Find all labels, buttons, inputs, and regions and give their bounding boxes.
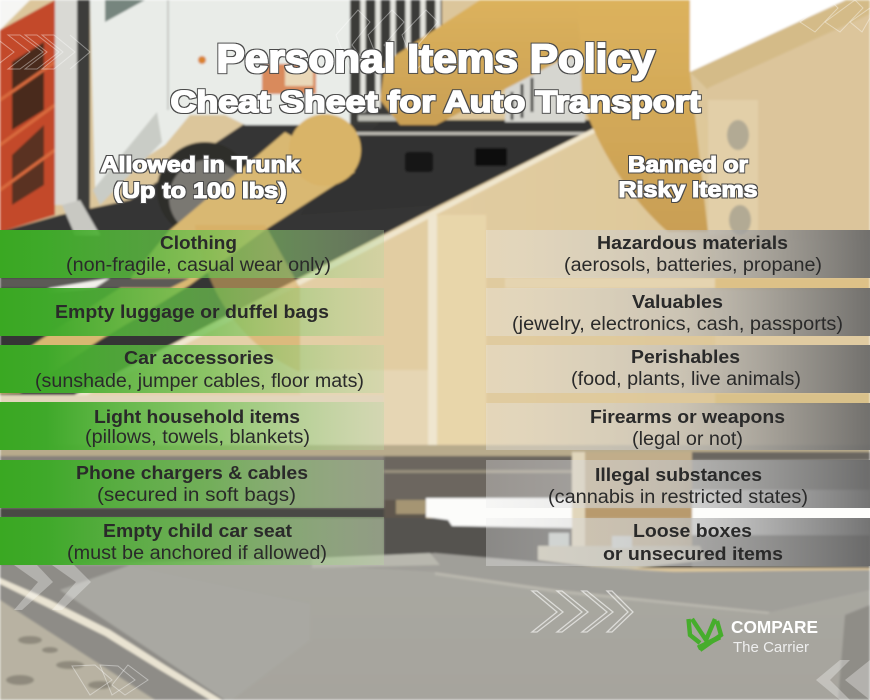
row: firearms: Firearms or weapons bbox=[590, 406, 785, 427]
row: loose boxes: Loose boxes bbox=[633, 520, 752, 541]
logo: compare the carrier: COMPARE bbox=[731, 617, 818, 637]
row: empty luggage: Empty luggage or duffel bags bbox=[55, 301, 329, 322]
icon: green logo mark bbox=[688, 619, 721, 650]
row: loose boxes: or unsecured items bbox=[603, 543, 783, 564]
row: hazardous materials: (aerosols, batteries, propane) bbox=[564, 255, 822, 276]
row: perishables: (food, plants, live animals) bbox=[571, 369, 801, 390]
row: empty child car seat: (must be anchored if allowed) bbox=[67, 543, 327, 564]
row: empty luggage bbox=[0, 288, 384, 336]
row: clothing: Clothing bbox=[160, 232, 237, 253]
row: empty child car seat: Empty child car seat bbox=[103, 520, 292, 541]
title bbox=[170, 37, 700, 119]
row: light household items: Light household items bbox=[94, 406, 300, 427]
row: valuables bbox=[486, 288, 870, 336]
row: car accessories: Car accessories bbox=[124, 347, 274, 368]
row: car accessories: (sunshade, jumper cables, floor mats) bbox=[35, 371, 364, 392]
row: illegal substances bbox=[486, 460, 870, 508]
row: valuables: (jewelry, electronics, cash, passports) bbox=[512, 314, 843, 335]
row: phone chargers bbox=[0, 460, 384, 508]
panel: allowed items bbox=[0, 230, 384, 565]
panel: banned items bbox=[486, 230, 870, 566]
heading: banned or risky items: Banned or bbox=[628, 152, 748, 177]
row: illegal substances: (cannabis in restricted states) bbox=[548, 487, 808, 508]
heading: banned or risky items: Risky Items bbox=[618, 177, 758, 202]
logo: compare the carrier bbox=[688, 617, 818, 656]
heading: allowed in trunk: (Up to 100 lbs) bbox=[114, 178, 286, 203]
title line 1: Personal Items Policy bbox=[216, 37, 655, 81]
heading: banned or risky items bbox=[618, 152, 758, 202]
row: perishables bbox=[486, 345, 870, 393]
row: hazardous materials bbox=[486, 230, 870, 278]
row: clothing bbox=[0, 230, 384, 278]
row: car accessories bbox=[0, 345, 384, 393]
row: valuables: Valuables bbox=[632, 291, 723, 312]
row: firearms: (legal or not) bbox=[632, 429, 743, 450]
row: light household items bbox=[0, 402, 384, 450]
heading: allowed in trunk bbox=[100, 152, 300, 203]
row: clothing: (non-fragile, casual wear only) bbox=[66, 255, 331, 276]
title line 2: Cheat Sheet for Auto Transport bbox=[170, 84, 700, 119]
row: hazardous materials: Hazardous materials bbox=[597, 232, 788, 253]
row: phone chargers: Phone chargers & cables bbox=[76, 462, 308, 483]
row: empty child car seat bbox=[0, 517, 384, 565]
row: light household items: (pillows, towels, blankets) bbox=[85, 427, 310, 448]
row: loose boxes bbox=[486, 518, 870, 566]
row: firearms bbox=[486, 403, 870, 450]
heading: allowed in trunk: Allowed in Trunk bbox=[100, 152, 300, 177]
row: illegal substances: Illegal substances bbox=[595, 464, 762, 485]
logo: compare the carrier: The Carrier bbox=[733, 639, 809, 656]
row: phone chargers: (secured in soft bags) bbox=[97, 485, 296, 506]
row: perishables: Perishables bbox=[631, 346, 740, 367]
